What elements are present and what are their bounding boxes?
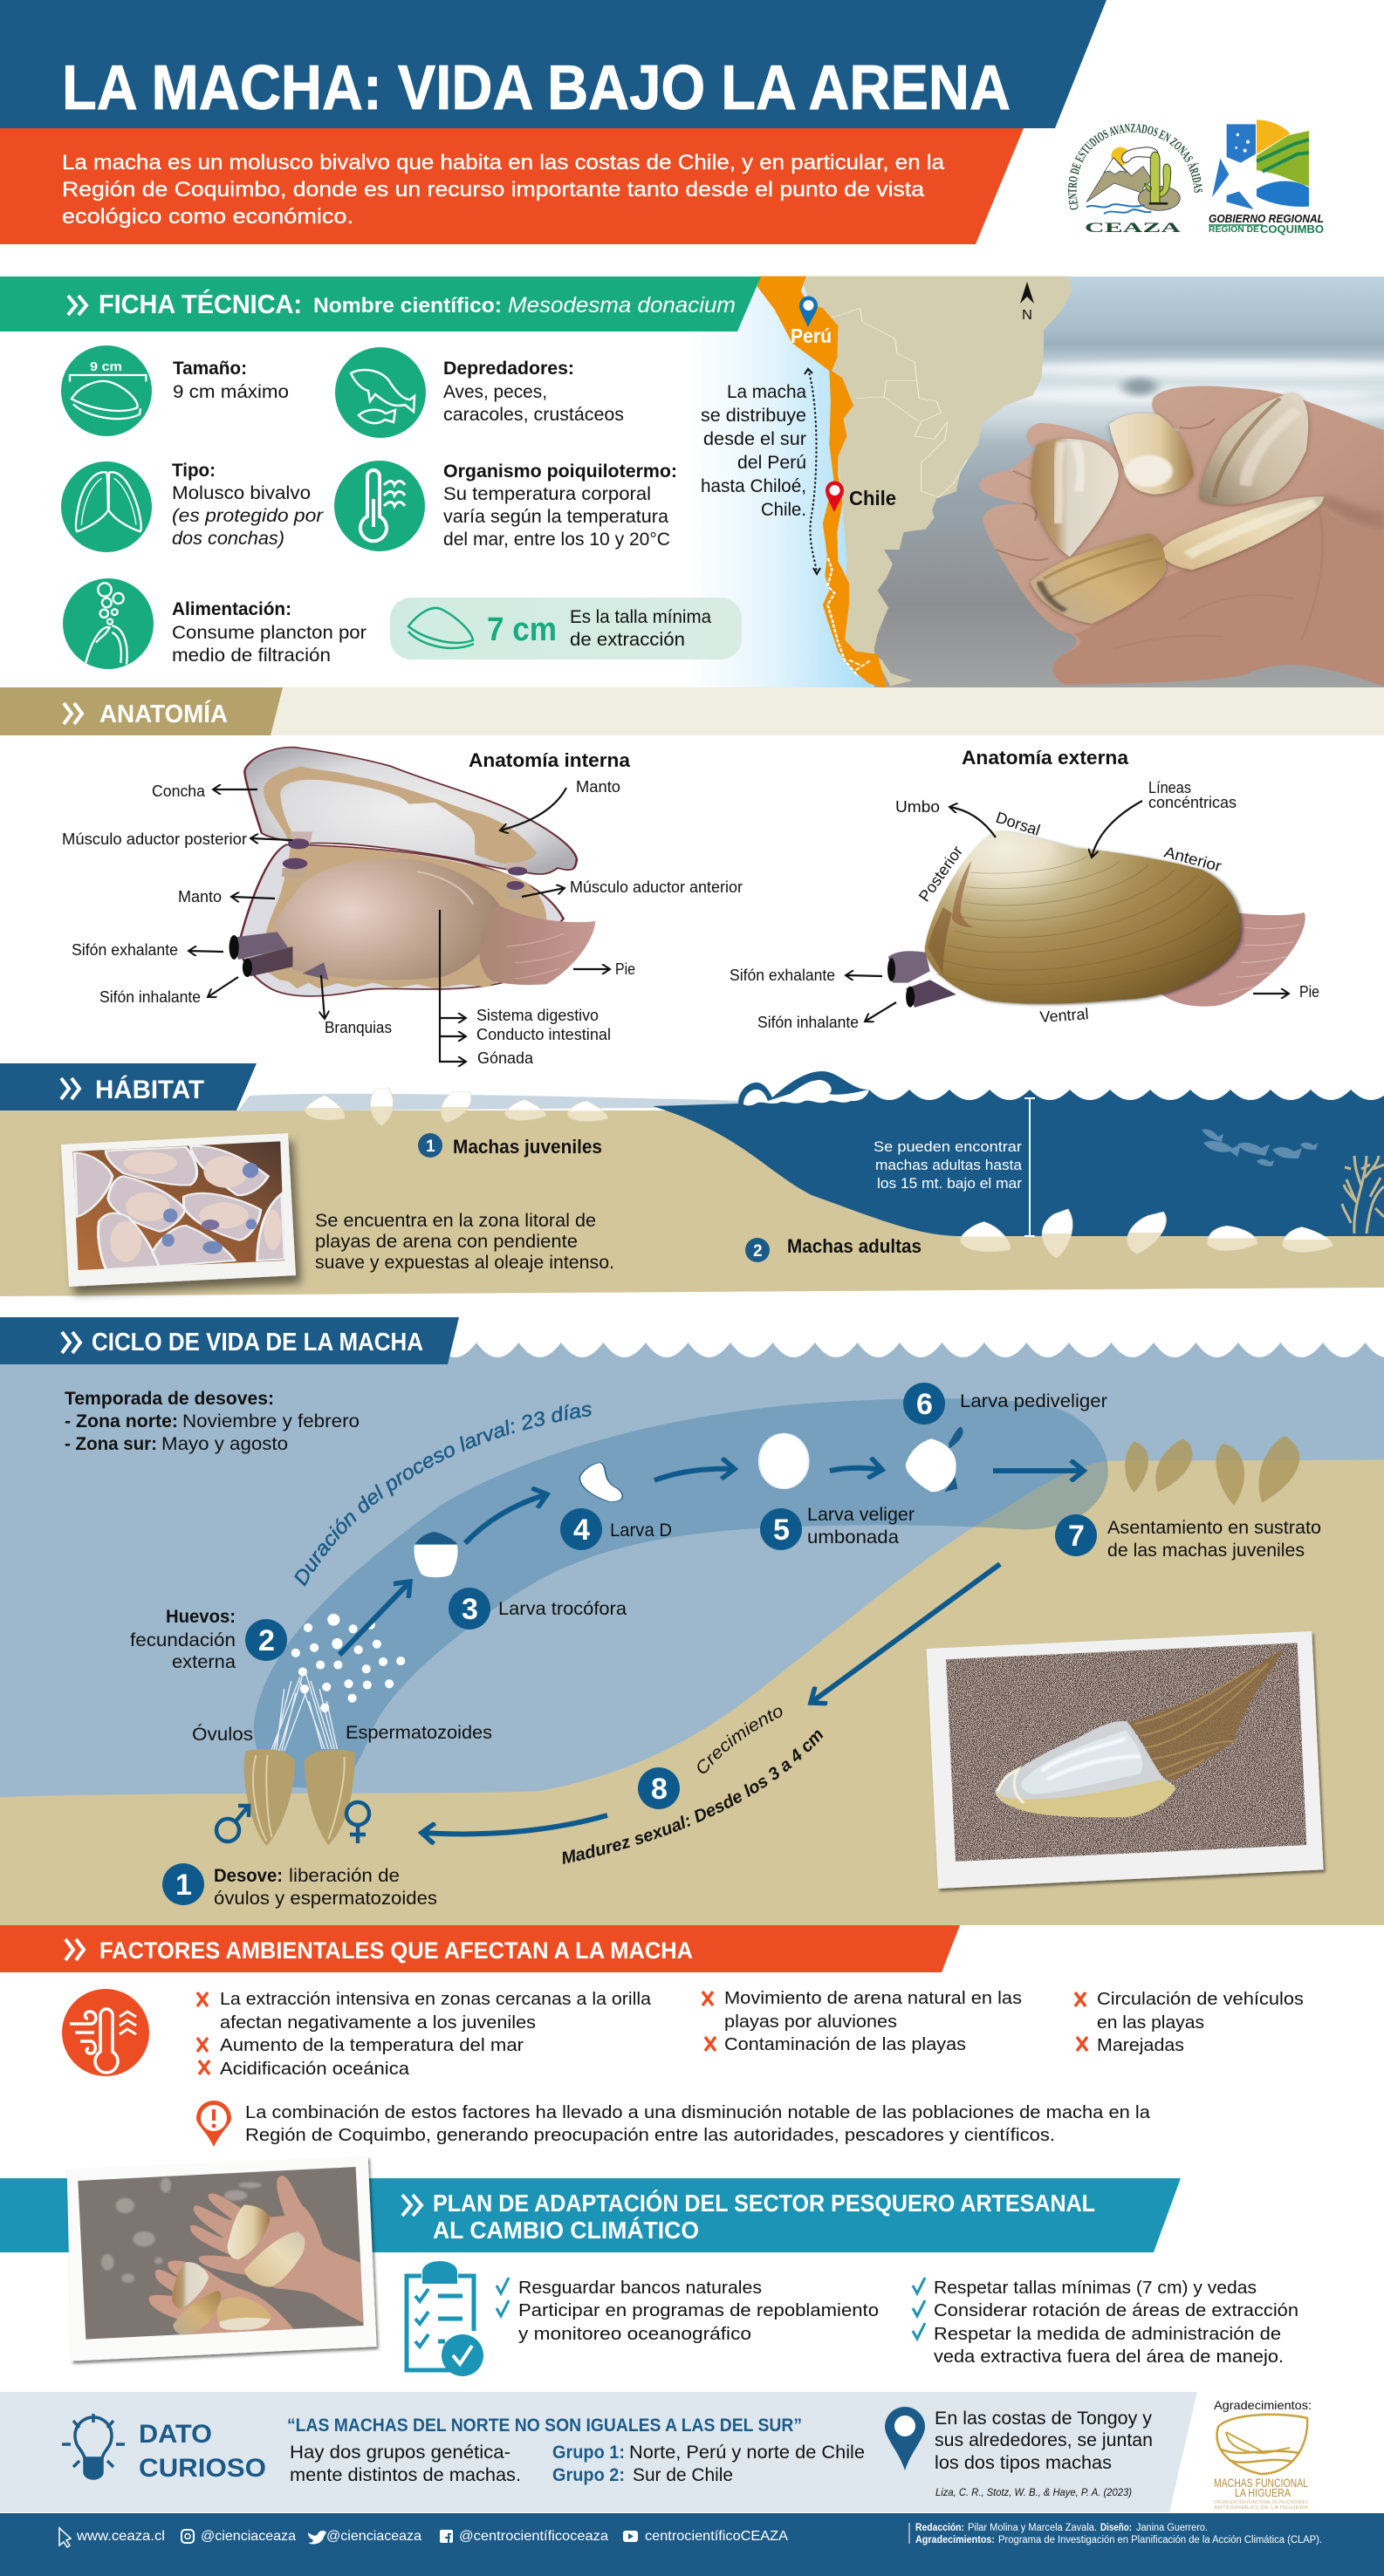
labels: cycle stages: Crecimiento bbox=[697, 1708, 782, 1773]
depth marker and note bbox=[874, 1098, 1035, 1236]
map pin: Chile bbox=[826, 482, 896, 512]
larvae bbox=[415, 1426, 963, 1577]
icon: shell size: 9 cm bbox=[90, 359, 122, 374]
panel: life cycle bbox=[0, 1343, 1384, 1925]
labels: external anatomy: Dorsal bbox=[994, 809, 1042, 839]
labels: cycle stages: Madurez sexual: Desde los 3 a 4 cm bbox=[562, 1731, 824, 1864]
labels: external anatomy bbox=[730, 747, 1319, 1031]
numbered steps: 8 bbox=[651, 1773, 668, 1806]
heading: factores ambientales: FACTORES AMBIENTALES QUE AFECTAN A LA MACHA bbox=[99, 1937, 693, 1964]
icon: thermometer and water bbox=[334, 461, 425, 551]
photo: macha on sand bbox=[927, 1631, 1324, 1889]
text: alimentacion: medio de filtración bbox=[172, 646, 331, 666]
labels: external anatomy: concéntricas bbox=[1148, 794, 1237, 811]
text: organismo poiquilotermo: del mar, entre los 10 y 20°C bbox=[443, 530, 670, 550]
text: tongoy note bbox=[935, 2409, 1153, 2498]
labels: cycle stages: Asentamiento en sustrato bbox=[1107, 1518, 1321, 1538]
text: tongoy note: En las costas de Tongoy y bbox=[935, 2409, 1153, 2429]
text: depredadores: Depredadores: bbox=[443, 359, 574, 379]
footer: Janina Guerrero. bbox=[1136, 2523, 1208, 2533]
labels: machas adultas: 2 bbox=[753, 1242, 763, 1261]
list: factores columna 1 bbox=[197, 1989, 652, 2079]
labels: internal anatomy: Anatomía interna bbox=[469, 749, 631, 771]
text: genetic groups: Norte, Perú y norte de Chile bbox=[629, 2443, 865, 2463]
labels: cycle stages bbox=[130, 1391, 1321, 1909]
intro panel: La macha es un molusco bivalvo que habita en las costas de Chile, y en particular, en la bbox=[62, 151, 945, 174]
callout: minimum size 7 cm bbox=[390, 598, 742, 659]
numbered steps: 3 bbox=[462, 1593, 478, 1626]
callout: minimum size 7 cm: 7 cm bbox=[487, 612, 557, 648]
labels: external anatomy: Posterior bbox=[915, 843, 966, 905]
icon: warning pin bbox=[196, 2101, 231, 2147]
distribution note: hasta Chiloé, bbox=[701, 476, 806, 496]
heading: anatomia: ANATOMÍA bbox=[99, 699, 228, 728]
logo: Gobierno Regional de Coquimbo: COQUIMBO bbox=[1260, 222, 1324, 236]
text: genetic groups: Grupo 1: bbox=[552, 2443, 625, 2463]
map pin: Peru bbox=[791, 297, 832, 347]
numbered steps: 2 bbox=[258, 1624, 275, 1657]
heading: habitat: HÁBITAT bbox=[95, 1075, 204, 1104]
text: tipo: dos conchas) bbox=[172, 529, 284, 549]
list: factores columna 3: Marejadas bbox=[1097, 2035, 1184, 2055]
heading: ficha tecnica: Nombre científico: bbox=[313, 294, 502, 318]
footer: centrocientíficoCEAZA bbox=[645, 2529, 788, 2544]
text: spawning season: Noviembre y febrero bbox=[182, 1411, 360, 1431]
numbered steps: 7 bbox=[1068, 1520, 1085, 1553]
heading: dato curioso: CURIOSO bbox=[139, 2454, 266, 2483]
footer: @cienciaceaza bbox=[326, 2529, 421, 2544]
distribution note: desde el sur bbox=[703, 429, 806, 449]
labels: machas juveniles bbox=[418, 1133, 602, 1158]
list: factores columna 3: Circulación de vehículos bbox=[1097, 1989, 1304, 2009]
labels: cycle stages: umbonada bbox=[807, 1527, 899, 1548]
label: larval duration: Duración del proceso larval: 23 días bbox=[294, 1404, 592, 1587]
list: plan columna 2: Respetar tallas mínimas (7 cm) y vedas bbox=[934, 2278, 1257, 2298]
heading: ficha tecnica: FICHA TÉCNICA: bbox=[99, 289, 302, 319]
labels: external anatomy: Sifón inhalante bbox=[757, 1014, 859, 1031]
footer: Pilar Molina y Marcela Zavala. bbox=[968, 2523, 1097, 2533]
photo: hands holding machas bbox=[868, 277, 1384, 687]
heading: ficha tecnica: Mesodesma donacium bbox=[508, 293, 736, 318]
labels: machas juveniles: Machas juveniles bbox=[453, 1136, 602, 1158]
list: factores columna 2: Movimiento de arena natural en las bbox=[724, 1988, 1022, 2008]
icon: clipboard bbox=[407, 2263, 483, 2376]
labels: machas adultas bbox=[745, 1235, 922, 1262]
labels: internal anatomy: Músculo aductor anterior bbox=[570, 878, 743, 896]
logo: Gobierno Regional de Coquimbo: REGION DE bbox=[1209, 225, 1259, 235]
text: tipo: Tipo: bbox=[172, 461, 216, 481]
labels: internal anatomy: Pie bbox=[615, 960, 635, 978]
text: tipo: (es protegido por bbox=[172, 506, 324, 526]
labels: machas adultas: Machas adultas bbox=[787, 1235, 922, 1257]
text: organismo poiquilotermo: Su temperatura corporal bbox=[443, 484, 651, 504]
heading: anatomia bbox=[0, 687, 1384, 735]
text: spawning season: Mayo y agosto bbox=[161, 1434, 288, 1454]
labels: internal anatomy bbox=[62, 749, 743, 1067]
arrows: cycle bbox=[339, 1468, 1084, 1834]
icon: climate factors bbox=[62, 1989, 149, 2076]
text: depredadores: Aves, peces, bbox=[443, 382, 547, 402]
labels: cycle stages: óvulos y espermatozoides bbox=[214, 1889, 437, 1909]
footer: Diseño: bbox=[1100, 2523, 1132, 2533]
text: depredadores bbox=[443, 359, 624, 425]
text: organismo poiquilotermo: varía según la temperatura bbox=[443, 507, 668, 527]
text: tongoy note: los dos tipos machas bbox=[935, 2453, 1112, 2473]
labels: external anatomy: Ventral bbox=[1039, 1005, 1089, 1026]
text: spawning season bbox=[65, 1389, 360, 1454]
list: plan columna 2: veda extractiva fuera del área de manejo. bbox=[934, 2347, 1284, 2367]
distribution note: se distribuye bbox=[701, 406, 806, 426]
logo: CEAZA: CEAZA bbox=[1085, 221, 1182, 236]
adult machas bbox=[961, 1209, 1333, 1258]
icon: light bulb bbox=[62, 2414, 125, 2478]
labels: internal anatomy: Concha bbox=[152, 782, 206, 800]
footer: Redacción: bbox=[915, 2523, 964, 2533]
list: factores columna 1: afectan negativamente a los juveniles bbox=[220, 2012, 536, 2033]
heading: habitat bbox=[0, 1063, 257, 1110]
numbered steps bbox=[162, 1383, 1097, 1905]
heading: ciclo de vida: CICLO DE VIDA DE LA MACHA bbox=[92, 1329, 423, 1356]
distribution note: del Perú bbox=[737, 453, 806, 473]
list: factores columna 1: La extracción intensiva en zonas cercanas a la orilla bbox=[220, 1989, 652, 2009]
labels: cycle stages: Larva veliger bbox=[807, 1505, 915, 1525]
text: organismo poiquilotermo bbox=[443, 461, 677, 550]
text: genetic groups bbox=[290, 2443, 865, 2485]
spawning adults bbox=[244, 1669, 355, 1846]
numbered steps: 5 bbox=[773, 1513, 790, 1547]
logo: machas funcional la higuera: ARTESANALES DE LA HIGUERA bbox=[1214, 2505, 1309, 2511]
photo: two hands with machas bbox=[67, 2156, 377, 2361]
text: tipo bbox=[172, 461, 324, 549]
map pin: Peru: Perú bbox=[791, 325, 832, 347]
list: plan columna 1: Resguardar bancos naturales bbox=[518, 2278, 762, 2298]
list: factores columna 2: Contaminación de las playas bbox=[724, 2034, 966, 2054]
labels: external anatomy: Anterior bbox=[1162, 844, 1223, 875]
footer: www.ceaza.cl bbox=[76, 2529, 165, 2544]
text: genetic groups: Hay dos grupos genética- bbox=[290, 2443, 510, 2463]
heading: dato curioso bbox=[139, 2420, 266, 2483]
map pin: Chile: Chile bbox=[849, 487, 896, 509]
text: tongoy note: sus alrededores, se juntan bbox=[935, 2430, 1153, 2450]
labels: external anatomy: Umbo bbox=[895, 798, 940, 816]
text: habitat description: playas de arena con pendiente bbox=[315, 1232, 578, 1252]
panel: dato curioso bbox=[0, 2392, 1197, 2512]
map of Chile and Peru bbox=[689, 277, 1072, 689]
heading: plan de adaptacion bbox=[0, 2178, 1181, 2252]
distribution note bbox=[701, 382, 806, 520]
labels: cycle stages: externa bbox=[172, 1652, 236, 1672]
labels: internal anatomy: Sifón inhalante bbox=[99, 988, 201, 1006]
text: genetic groups: Grupo 2: bbox=[552, 2465, 625, 2485]
text: tamano bbox=[173, 359, 289, 402]
footer: @centrocientíficoceaza bbox=[459, 2529, 608, 2544]
arrows: internal anatomy bbox=[188, 788, 610, 1062]
numbered steps: 6 bbox=[916, 1388, 933, 1421]
symbol: male bbox=[216, 1806, 249, 1841]
logo: Gobierno Regional de Coquimbo bbox=[1209, 120, 1324, 236]
labels: cycle stages: Huevos: bbox=[166, 1607, 236, 1627]
list: factores columna 1: Aumento de la temperatura del mar bbox=[220, 2035, 524, 2055]
labels: external anatomy: Anatomía externa bbox=[962, 747, 1129, 769]
arrows: external anatomy bbox=[846, 801, 1289, 1022]
text: tongoy note: Liza, C. R., Stotz, W. B., & Haye, P. A. (2023) bbox=[935, 2486, 1132, 2498]
north arrow: N bbox=[1022, 308, 1032, 323]
labels: internal anatomy: Conducto intestinal bbox=[476, 1026, 611, 1043]
text: genetic groups: Sur de Chile bbox=[633, 2465, 733, 2485]
footer: @cienciaceaza bbox=[201, 2529, 296, 2544]
heading: ficha tecnica bbox=[0, 277, 761, 331]
north arrow bbox=[1020, 282, 1034, 323]
juvenile settled shells bbox=[1125, 1436, 1299, 1506]
labels: machas juveniles: 1 bbox=[426, 1138, 435, 1156]
text: alimentacion: Alimentación: bbox=[172, 599, 291, 619]
text: quote: “LAS MACHAS DEL NORTE NO SON IGUALES A LAS DEL SUR” bbox=[287, 2415, 802, 2436]
icon: location pin bbox=[885, 2407, 925, 2470]
labels: external anatomy: Líneas bbox=[1148, 779, 1191, 796]
labels: internal anatomy: Manto bbox=[576, 778, 620, 796]
list: plan columna 1: y monitoreo oceanográfico bbox=[518, 2324, 751, 2344]
labels: internal anatomy: Branquias bbox=[325, 1019, 392, 1036]
intro panel: ecológico como económico. bbox=[62, 205, 353, 229]
labels: cycle stages: Desove: bbox=[214, 1866, 283, 1886]
heading: ciclo de vida bbox=[0, 1317, 459, 1364]
text: factors conclusion: La combinación de estos factores ha llevado a una disminución notable de las poblaciones de macha en la bbox=[245, 2102, 1151, 2122]
labels: cycle stages: de las machas juveniles bbox=[1107, 1541, 1305, 1561]
labels: internal anatomy: Manto bbox=[178, 888, 222, 905]
logo: machas funcional la higuera: ORGANIZACIÓN FUNCIONAL DE PESCADORES bbox=[1214, 2499, 1309, 2505]
icon: shell size bbox=[61, 345, 152, 436]
list: plan columna 1: Participar en programas de repoblamiento bbox=[518, 2300, 879, 2320]
list: plan columna 2 bbox=[913, 2278, 1298, 2367]
depth marker and note: los 15 mt. bajo el mar bbox=[877, 1175, 1022, 1192]
text: genetic groups: mente distintos de machas. bbox=[290, 2465, 521, 2485]
list: factores columna 2: playas por aluviones bbox=[724, 2012, 897, 2032]
heading: factores ambientales bbox=[0, 1925, 960, 1972]
list: factores columna 3 bbox=[1075, 1989, 1304, 2055]
list: factores columna 2 bbox=[702, 1988, 1022, 2054]
heading: plan de adaptacion: PLAN DE ADAPTACIÓN DEL SECTOR PESQUERO ARTESANAL bbox=[433, 2190, 1095, 2217]
logo: machas funcional la higuera: MACHAS FUNCIONAL bbox=[1214, 2476, 1308, 2490]
labels: internal anatomy: Sifón exhalante bbox=[72, 941, 178, 959]
text: factors conclusion bbox=[245, 2102, 1151, 2145]
text: spawning season: - Zona sur: bbox=[65, 1434, 157, 1454]
logo: machas funcional la higuera bbox=[1214, 2398, 1312, 2511]
labels: internal anatomy: Gónada bbox=[477, 1049, 534, 1067]
heading: dato curioso: DATO bbox=[139, 2420, 212, 2449]
text: alimentacion bbox=[172, 599, 367, 666]
title banner: LA MACHA: VIDA BAJO LA ARENA bbox=[62, 53, 1011, 123]
text: tipo: Molusco bivalvo bbox=[172, 483, 311, 503]
labels: internal anatomy: Sistema digestivo bbox=[476, 1007, 599, 1024]
labels: cycle stages: Espermatozoides bbox=[346, 1723, 492, 1743]
text: alimentacion: Consume plancton por bbox=[172, 623, 367, 643]
depth marker and note: Se pueden encontrar bbox=[874, 1138, 1022, 1155]
text: spawning season: - Zona norte: bbox=[65, 1411, 178, 1431]
illustration: external anatomy bbox=[887, 831, 1305, 1008]
text: spawning season: Temporada de desoves: bbox=[65, 1389, 274, 1409]
list: plan columna 1 bbox=[497, 2278, 879, 2344]
labels: internal anatomy: Músculo aductor posterior bbox=[62, 830, 247, 848]
distribution note: La macha bbox=[727, 382, 806, 402]
logo: Gobierno Regional de Coquimbo: GOBIERNO REGIONAL bbox=[1209, 212, 1324, 225]
labels: cycle stages: Óvulos bbox=[192, 1725, 253, 1745]
icon: bivalve shells bbox=[61, 461, 152, 552]
labels: external anatomy: Pie bbox=[1299, 983, 1319, 1001]
depth marker and note: machas adultas hasta bbox=[875, 1157, 1023, 1173]
icon: fish school bbox=[1202, 1129, 1318, 1166]
text: tamano: Tamaño: bbox=[173, 359, 247, 379]
heading: plan de adaptacion: AL CAMBIO CLIMÁTICO bbox=[433, 2217, 699, 2244]
intro panel: Región de Coquimbo, donde es un recurso importante tanto desde el punto de vista bbox=[62, 178, 925, 202]
icon: fish predators bbox=[335, 347, 426, 438]
footer: Programa de Investigación en Planificación de la Acción Climática (CLAP). bbox=[998, 2535, 1322, 2545]
text: habitat description: suave y expuestas al oleaje intenso. bbox=[315, 1253, 614, 1273]
text: tamano: 9 cm máximo bbox=[173, 382, 289, 402]
labels: cycle stages: Larva pediveliger bbox=[960, 1391, 1107, 1411]
eggs bbox=[291, 1614, 405, 1712]
symbol: female bbox=[346, 1802, 369, 1843]
labels: cycle stages: Larva D bbox=[610, 1520, 672, 1541]
distribution note: Chile. bbox=[761, 500, 806, 520]
list: factores columna 1: Acidificación oceánica bbox=[220, 2059, 410, 2079]
logo: machas funcional la higuera: LA HIGUERA bbox=[1235, 2486, 1291, 2499]
icon: seaweed bbox=[1342, 1156, 1384, 1233]
text: habitat description: Se encuentra en la zona litoral de bbox=[315, 1211, 596, 1231]
text: depredadores: caracoles, crustáceos bbox=[443, 405, 624, 425]
text: organismo poiquilotermo: Organismo poiquilotermo: bbox=[443, 461, 677, 482]
photo: opened machas bbox=[61, 1133, 296, 1287]
numbered steps: 1 bbox=[175, 1869, 192, 1902]
logo: machas funcional la higuera: Agradecimientos: bbox=[1214, 2398, 1312, 2412]
callout: minimum size 7 cm: de extracción bbox=[570, 630, 685, 650]
list: plan columna 2: Respetar la medida de administración de bbox=[934, 2324, 1281, 2344]
list: plan columna 2: Considerar rotación de áreas de extracción bbox=[934, 2300, 1298, 2320]
juvenile machas bbox=[305, 1088, 607, 1125]
callout: minimum size 7 cm: Es la talla mínima bbox=[570, 607, 711, 627]
footer: Agradecimientos: bbox=[915, 2535, 995, 2545]
text: factors conclusion: Región de Coquimbo, generando preocupación entre las autoridades, pescadores y científicos. bbox=[245, 2125, 1055, 2145]
panel: habitat bbox=[0, 1071, 1384, 1296]
intro panel bbox=[0, 128, 1024, 244]
labels: cycle stages: Larva trocófora bbox=[498, 1599, 627, 1619]
title banner bbox=[0, 0, 1107, 128]
illustration: internal anatomy bbox=[230, 748, 595, 996]
numbered steps: 4 bbox=[573, 1513, 590, 1547]
labels: external anatomy: Sifón exhalante bbox=[730, 967, 835, 984]
icon: feeding filter bbox=[63, 578, 154, 669]
list: factores columna 3: en las playas bbox=[1097, 2012, 1204, 2033]
labels: cycle stages: fecundación bbox=[130, 1630, 236, 1650]
text: habitat description bbox=[315, 1211, 614, 1273]
footer bbox=[0, 2513, 1384, 2576]
logo: CEAZA: CENTRO DE ESTUDIOS AVANZADOS EN ZONAS ÁRIDAS bbox=[1068, 124, 1202, 209]
labels: cycle stages: liberación de bbox=[289, 1866, 400, 1886]
